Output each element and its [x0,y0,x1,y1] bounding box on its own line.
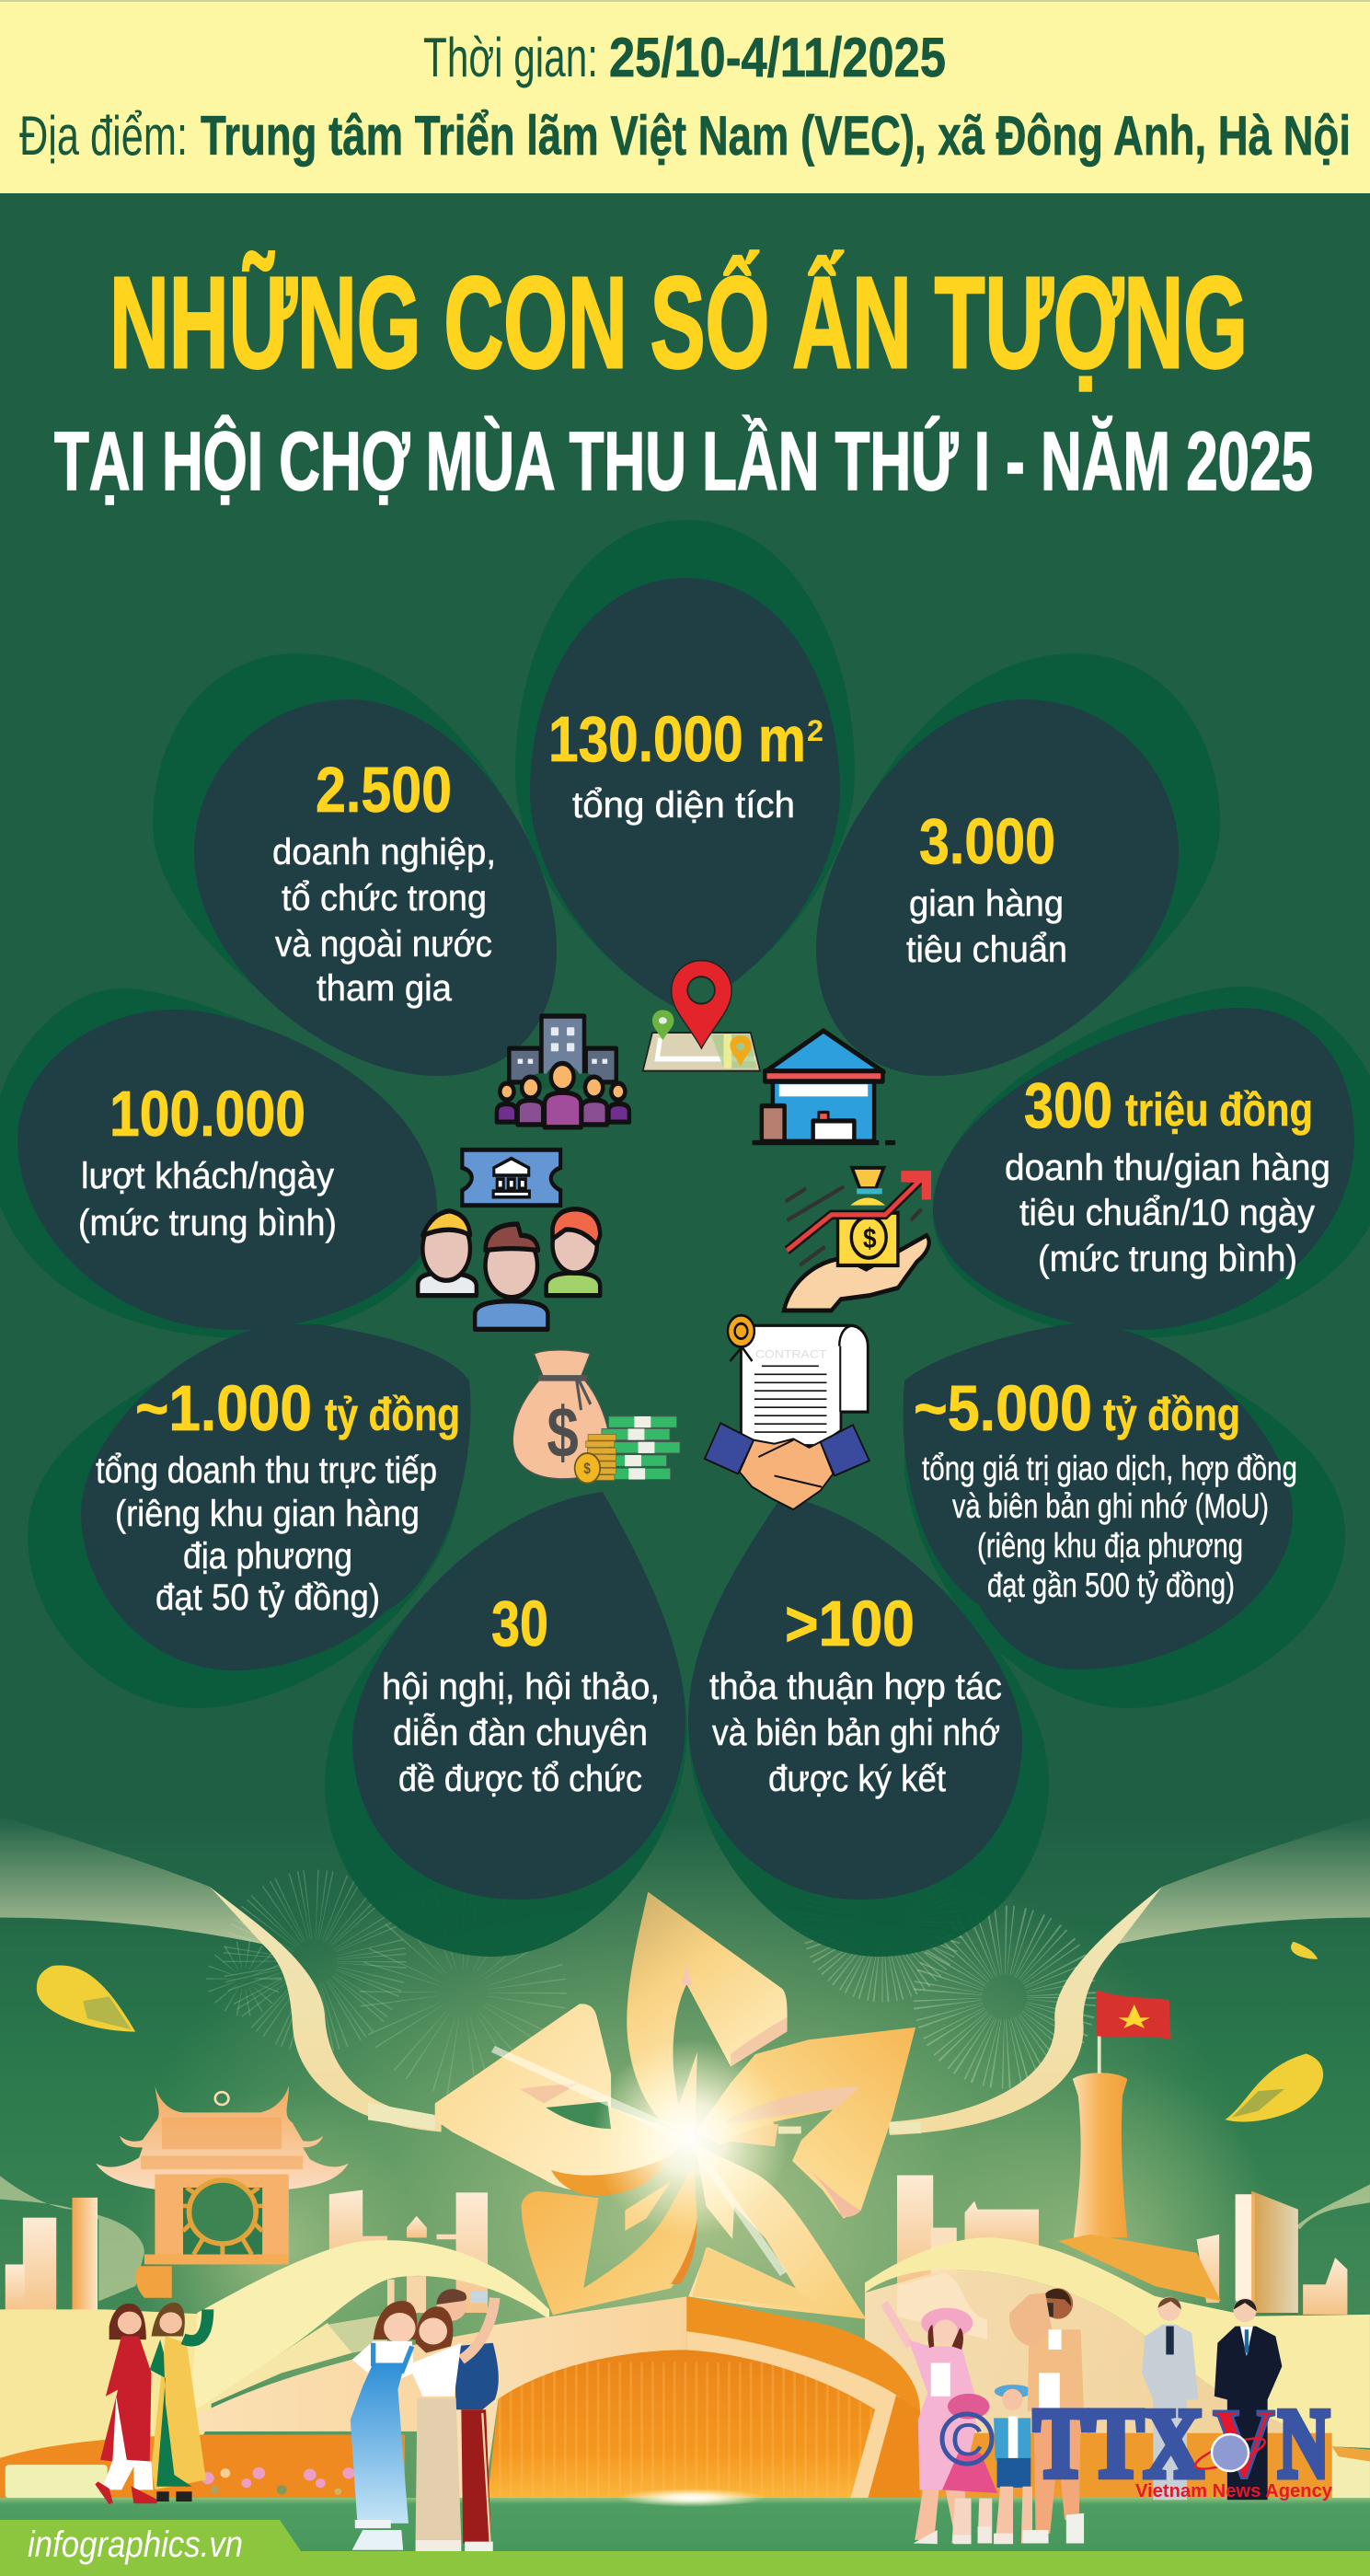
globe [1192,2432,1268,2475]
petal: bottom-right [688,2144,867,2319]
petal: left [435,2004,692,2191]
petal: total area: 130.000 m [548,703,806,775]
petal: direct revenue: ~1.000 [135,1372,312,1444]
icon: money bag with cash and coins: $ [547,1393,579,1473]
icon: hand with money bag and growth arrow: $ [863,1222,877,1254]
copyright mark: C [950,2414,984,2466]
icon: hand with money bag and growth arrow [784,1168,931,1311]
stub ribbon left [368,2103,435,2131]
logo: TTXVN [942,2389,1333,2501]
woman in beige [416,2306,453,2353]
logo: TTXVN: Vietnam News Agency [1135,2481,1333,2501]
icon: map with location pins [643,961,760,1071]
petal: standard booths: tiêu chuẩn [906,930,1067,970]
footer lime strip with site tab [0,2520,1370,2576]
cream roof wing [197,2319,552,2432]
orange base band [0,2435,405,2498]
petal: enterprises: tham gia [317,968,453,1009]
petal: revenue per booth: tiêu chuẩn/10 ngày [1019,1193,1315,1233]
petal: right [696,2027,915,2219]
flower beds [201,2467,354,2495]
icon: exhibition booth [753,1031,895,1143]
petal: conferences: hội nghị, hội thảo, [382,1667,660,1707]
exhibition building [456,2296,920,2498]
temple gate [96,2085,349,2298]
icon: contract and handshake [705,1315,869,1509]
logo: TTXVN: N [1278,2389,1330,2499]
left skyline and temple gate [0,2085,552,2498]
people: family, right side [884,2288,1282,2544]
people: two women in ao dai [97,2303,208,2503]
petal: enterprises [194,699,557,1076]
boy [995,2385,1031,2398]
petal: direct revenue: (riêng khu gian hàng [115,1494,420,1534]
tower [1073,2073,1127,2237]
central light burst [592,2039,789,2237]
right skyline and flag tower [865,2073,1370,2498]
flag [1097,1990,1171,2074]
petal halos [0,520,1370,1957]
people: selfie group [351,2289,499,2552]
petal: conferences: diễn đàn chuyên [393,1712,648,1753]
time line [423,27,946,88]
site name: infographics.vn [28,2524,243,2565]
petal: total area: 2 [807,714,823,747]
petal: top [627,1892,788,2136]
petal: conferences: đề được tổ chức [398,1759,642,1799]
petal: enterprises: và ngoài nước [275,924,492,965]
petal: transaction value: đạt gần 500 tỷ đồng) [987,1566,1235,1604]
petal: transaction value: và biên bản ghi nhớ (MoU) [952,1487,1269,1525]
photographer [1043,2288,1073,2319]
copyright mark [942,2414,992,2466]
petal: revenue per booth: (mức trung bình) [1038,1239,1297,1279]
petal: direct revenue [81,1324,471,1670]
petal: transaction value: tỷ đồng [1103,1389,1240,1440]
petal: standard booths: 3.000 [919,805,1055,877]
ground light [618,2489,766,2507]
petal: cooperation agreements: >100 [785,1588,915,1659]
time line: Thời gian: [423,27,598,88]
ribbons behind flower [0,1817,1370,2135]
petal: visitors per day: 100.000 [109,1078,305,1149]
petal: revenue per booth: triệu đồng [1125,1084,1313,1136]
man [437,2293,466,2321]
woman in overalls [374,2301,417,2339]
petal: visitors per day: lượt khách/ngày [81,1156,334,1196]
man in navy suit [1234,2298,1257,2322]
icon: contract and handshake: CONTRACT [755,1349,827,1361]
icon: buildings with crowd [497,1016,629,1127]
petal: transaction value: ~5.000 [914,1372,1092,1444]
petal: transaction value [904,1323,1297,1669]
icon: money bag with cash and coins [512,1350,680,1484]
pale yellow field and wave [0,2309,212,2458]
icon: ticket [462,1149,560,1206]
petal: total area [530,578,840,1012]
petal: bottom-left [521,2165,697,2315]
petal: direct revenue: tổng doanh thu trực tiếp [96,1450,437,1491]
petal: direct revenue: đạt 50 tỷ đồng) [155,1577,380,1618]
petal: enterprises: tổ chức trong [282,878,487,918]
petal: conferences: 30 [491,1588,548,1659]
petal: cooperation agreements: và biên bản ghi nhớ [712,1713,1000,1753]
petal: standard booths: gian hàng [909,884,1064,924]
falling leaves [37,1942,1323,2121]
logo: TTXVN: TTX [1033,2389,1203,2499]
petal: visitors per day: (mức trung bình) [78,1203,337,1243]
petal: total area: tổng diện tích [572,785,795,826]
petal: revenue per booth [933,1008,1354,1330]
man in grey suit [1157,2297,1180,2321]
logo: TTXVN: V [1213,2389,1275,2499]
icon: visitors [418,1209,600,1329]
illustration: bottom festival scene [0,520,1370,2576]
petal: revenue per booth: 300 [1024,1069,1112,1141]
petal: transaction value: (riêng khu địa phương [977,1527,1243,1565]
petal: enterprises: 2.500 [316,754,452,826]
petal: cooperation agreements [688,1496,1022,1900]
fireworks [220,1871,1062,2057]
petal: standard booths [816,699,1179,1076]
woman in pink [884,2303,910,2346]
petal: direct revenue: địa phương [183,1536,352,1577]
venue line: Địa điểm: [19,105,188,167]
girl [948,2394,989,2419]
info banner: time and venue [0,0,1370,193]
petal: direct revenue: tỷ đồng [325,1389,460,1440]
petal: conferences [352,1492,685,1900]
star flower monument [368,1892,921,2319]
time line: 25/10-4/11/2025 [609,27,946,88]
petal: enterprises: doanh nghiệp, [272,832,496,872]
petal: visitors per day [17,1010,437,1330]
icon: money bag with cash and coins: $ [583,1461,592,1477]
petal: revenue per booth: doanh thu/gian hàng [1005,1148,1330,1188]
ground [0,2498,1370,2553]
petal: cooperation agreements: thỏa thuận hợp tác [709,1667,1002,1707]
petal: cooperation agreements: được ký kết [768,1759,946,1799]
